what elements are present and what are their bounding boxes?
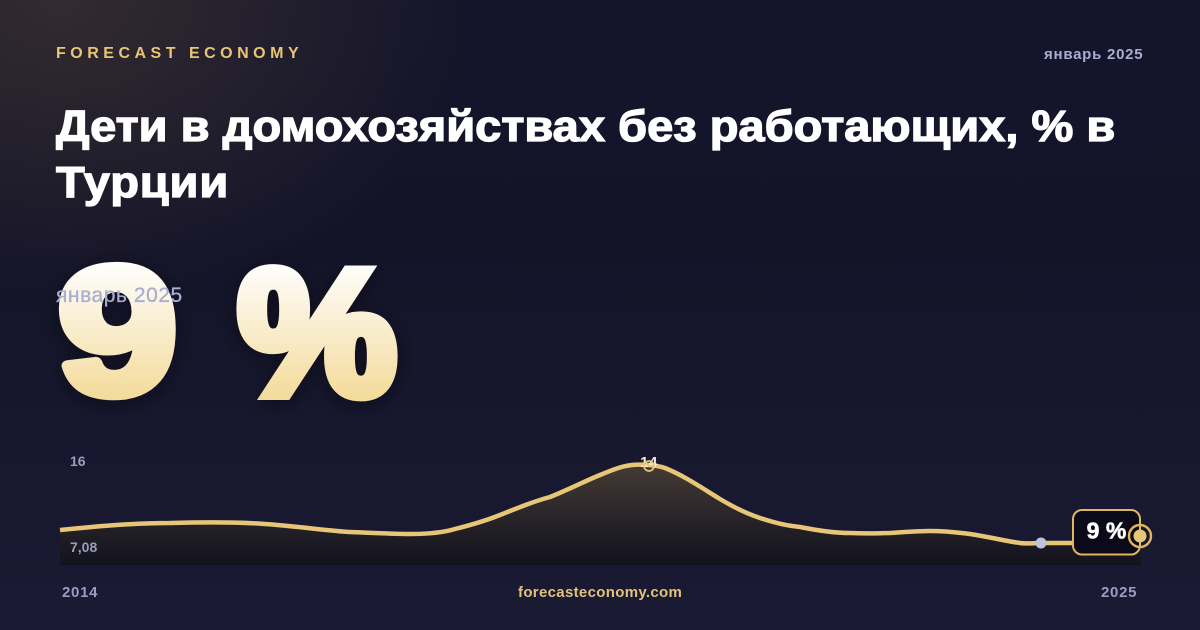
line bbox=[60, 465, 1140, 543]
penultimate point bbox=[1036, 538, 1046, 548]
peak label: 14 bbox=[640, 454, 658, 471]
sub date label: январь 2025 bbox=[56, 284, 183, 307]
brand label: FORECAST ECONOMY bbox=[56, 45, 303, 62]
date label: январь 2025 bbox=[1044, 46, 1143, 63]
value badge: 9 % bbox=[1087, 518, 1126, 544]
axis min: 7,08 bbox=[70, 539, 97, 555]
end year: 2025 bbox=[1101, 584, 1137, 601]
website: forecasteconomy.com bbox=[518, 584, 682, 601]
end marker bbox=[1129, 525, 1151, 547]
axis max: 16 bbox=[70, 453, 86, 469]
title: Турции bbox=[56, 158, 229, 207]
title bbox=[56, 102, 1115, 207]
value badge bbox=[1073, 510, 1140, 554]
start year: 2014 bbox=[62, 584, 98, 601]
big value bbox=[58, 230, 398, 430]
peak marker bbox=[644, 461, 654, 471]
big value: 9 bbox=[58, 230, 177, 430]
big value: % bbox=[238, 233, 396, 430]
chart bbox=[60, 453, 1152, 565]
area fill bbox=[60, 465, 1141, 565]
title: Дети в домохозяйствах без работающих, % в bbox=[56, 102, 1115, 151]
